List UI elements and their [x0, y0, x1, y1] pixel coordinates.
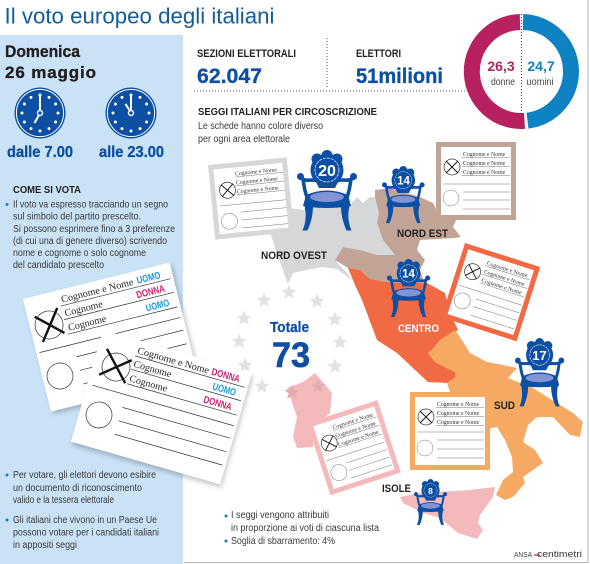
label: nord ovest: NORD OVEST [261, 250, 327, 262]
icon: clock 23.00 [106, 88, 156, 138]
ballot example: uomo donna uomo [23, 262, 198, 412]
ballot: nord ovest: Cognome e Nome [236, 185, 279, 195]
donut chart: donne uomini: donne [491, 77, 515, 88]
text: how to vote: (di cui una di genere diverso) scrivendo [13, 236, 167, 247]
heading: seggi per circoscrizione [198, 106, 377, 145]
ballot example: donna uomo donna: UOMO [211, 382, 237, 399]
ballot: nord est: Cognome e Nome [463, 152, 506, 158]
stat: elettori [356, 48, 443, 88]
text: documents: un documento di riconoscimento [13, 483, 142, 494]
ballot: nord ovest [211, 160, 291, 237]
stat: sezioni elettorali: 62.047 [197, 65, 262, 88]
text: voting from abroad: in appositi seggi [13, 540, 77, 551]
text: seat rules: Soglia di sbarramento: 4% [231, 536, 335, 547]
text: seat rules: in proporzione ai voti di ciascuna lista [231, 523, 379, 534]
chair: sud 17 [515, 338, 564, 406]
chair: isole 8: 8 [428, 486, 433, 496]
ballot: isole: Cognome e Nome [338, 429, 380, 448]
ballot: isole [310, 403, 398, 492]
stars over Sardinia [284, 378, 326, 399]
donut chart: donne uomini: 24,7 [527, 58, 555, 74]
credit: ANSA [514, 552, 532, 559]
ballot example: uomo donna uomo: UOMO [136, 270, 162, 287]
map: sicilia [400, 487, 495, 539]
chair: nord ovest 20 [297, 150, 357, 230]
ballot example: donna uomo donna: Cognome e Nome [136, 346, 211, 377]
time labels: dalle 7.00 [7, 144, 73, 161]
text: seat rules: I seggi vengono attribuiti [231, 510, 329, 521]
chair: isole 8 [414, 479, 447, 525]
ballot: nord est [438, 144, 514, 218]
ballot: isole: Cognome e Nome [335, 421, 377, 440]
label: isole: ISOLE [382, 483, 411, 495]
stars ring [232, 284, 348, 393]
stat: sezioni elettorali [197, 48, 296, 88]
ballot example: donna uomo donna [71, 330, 252, 484]
map: sud [428, 330, 583, 500]
stat: sezioni elettorali: SEZIONI ELETTORALI [197, 48, 296, 60]
time labels: alle 23.00 [99, 144, 164, 161]
label: centro: CENTRO [398, 323, 439, 335]
ballot example: uomo donna uomo: Cognome [63, 299, 104, 319]
ballot: centro: Cognome e Nome [486, 261, 528, 279]
chair: nord ovest 20: 20 [318, 163, 336, 180]
credit [514, 549, 582, 560]
text: documents: valido e la tessera elettorale [13, 495, 114, 506]
label: sud: SUD [494, 400, 515, 412]
text: documents: Per votare, gli elettori devono esibire [13, 470, 156, 481]
text: voting from abroad: possono votare per i candidati italiani [13, 528, 159, 538]
heading: seggi per circoscrizione: SEGGI ITALIANI PER CIRCOSCRIZIONE [198, 106, 377, 118]
ballot: nord ovest: Cognome e Nome [235, 167, 278, 177]
ballot example: donna uomo donna: Cognome [128, 373, 169, 395]
ballot: centro: Cognome e Nome [480, 278, 523, 297]
ballot: nord ovest: Cognome e Nome [236, 176, 279, 186]
heading: seggi per circoscrizione: Le schede hanno colore diverso [198, 121, 323, 132]
label: nord est: NORD EST [397, 228, 448, 240]
stat: elettori: 51milioni [356, 65, 443, 88]
date heading: Domenica [5, 42, 81, 61]
ballot: isole: Cognome e Nome [332, 412, 374, 431]
text: voting from abroad: Gli italiani che vivono in un Paese Ue [13, 515, 157, 526]
text: how to vote: Il voto va espresso tracciando un segno [13, 200, 168, 210]
heading: come si vota: COME SI VOTA [13, 185, 81, 196]
ballot example: donna uomo donna: Cognome [132, 359, 173, 380]
text: documents [6, 470, 156, 506]
total seats: 73 [272, 336, 310, 375]
ballot: sud: Cognome e Nome [437, 420, 480, 426]
map: sardegna [287, 373, 332, 448]
donut chart: donne uomini: uomini [526, 77, 554, 88]
chair: nord est 14: 14 [397, 176, 410, 188]
credit: centimetri [537, 549, 582, 560]
text: voting from abroad [6, 515, 159, 551]
ballot: sud: Cognome e Nome [437, 402, 480, 408]
text: how to vote [6, 200, 175, 271]
ballot example: uomo donna uomo: UOMO [145, 298, 171, 314]
map of Italy [270, 188, 583, 539]
text: how to vote: nome e cognome o solo cognome [13, 248, 146, 259]
chair: sud 17: 17 [532, 348, 547, 363]
ballot: sud [412, 394, 488, 468]
icon: clock 7.00 [14, 88, 66, 138]
ballot example: uomo donna uomo: DONNA [135, 284, 166, 301]
map: centro [348, 268, 458, 383]
donut chart: donne uomini: 26,3 [487, 58, 515, 74]
panel: come si vota [0, 35, 252, 564]
text: how to vote: del candidato prescelto [13, 260, 104, 271]
ballot: nord est: Cognome e Nome [463, 170, 506, 176]
ballot example: uomo donna uomo: Cognome e Nome [60, 277, 135, 306]
map: nord ovest [270, 197, 395, 284]
heading: seggi per circoscrizione: per ogni area elettorale [198, 134, 290, 145]
ballot: centro: Cognome e Nome [483, 269, 526, 288]
ballot: nord est: Cognome e Nome [463, 161, 506, 167]
text: seat rules [224, 510, 379, 547]
ballot example: uomo donna uomo: Cognome [67, 313, 108, 334]
chair: centro 14: 14 [402, 268, 415, 280]
date heading: 26 maggio [5, 63, 96, 82]
ballot example: donna uomo donna: DONNA [210, 367, 241, 385]
chair: centro 14 [387, 259, 430, 317]
title: Il voto europeo degli italiani [4, 4, 274, 28]
text: how to vote: sul simbolo del partito prescelto. [13, 212, 141, 222]
ballot example: donna uomo donna: DONNA [202, 395, 233, 413]
stat: elettori: ELETTORI [356, 48, 401, 60]
chair: nord est 14 [382, 166, 425, 223]
ballot: centro [444, 246, 537, 338]
date heading [5, 42, 96, 82]
donut chart: donne uomini [472, 14, 571, 130]
total seats: Totale [270, 319, 309, 336]
ballot: sud: Cognome e Nome [437, 411, 480, 417]
map: nord est [335, 188, 461, 290]
time labels [7, 144, 164, 161]
text: how to vote: Si possono esprimere fino a 3 preferenze [13, 224, 175, 235]
total seats [270, 319, 310, 375]
